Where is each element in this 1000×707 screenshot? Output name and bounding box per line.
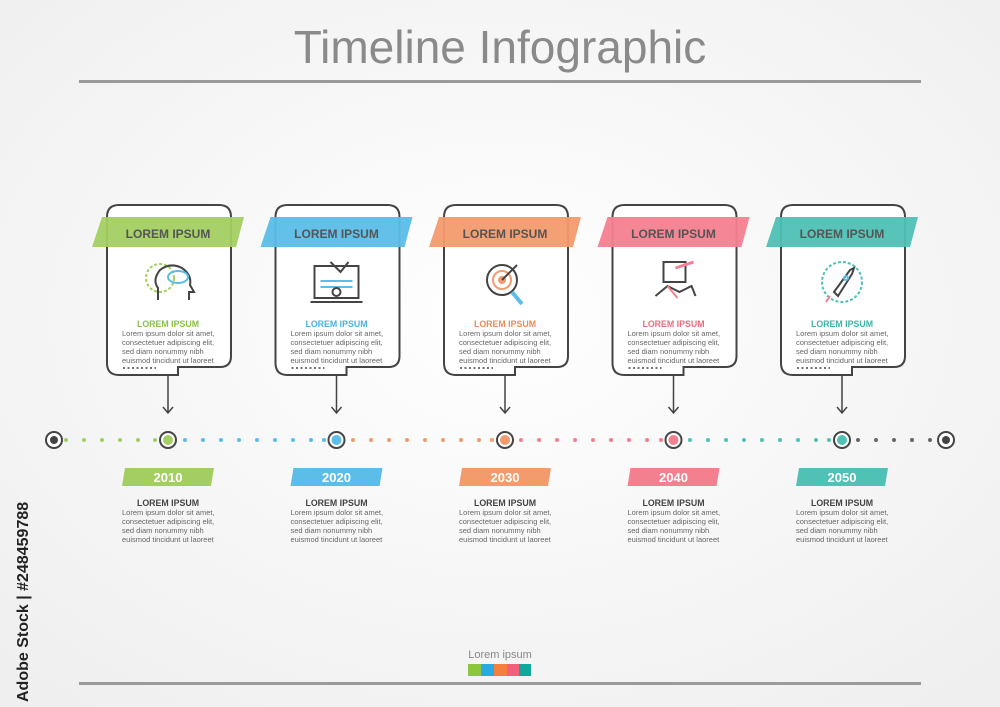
- step 2: LOREM IPSUM: [305, 319, 368, 329]
- step 3: Lorem ipsum dolor sit amet,: [459, 329, 552, 338]
- step 3: LOREM IPSUM: [463, 227, 547, 241]
- step 3: euismod tincidunt ut laoreet: [459, 356, 552, 365]
- title: Timeline Infographic: [294, 21, 706, 73]
- step 1: LOREM IPSUM: [137, 319, 199, 329]
- step 2: euismod tincidunt ut laoreet: [290, 535, 383, 544]
- step 1: Lorem ipsum dolor sit amet,: [122, 329, 215, 338]
- step 1: LOREM IPSUM: [126, 227, 210, 241]
- step 5: consectetuer adipiscing elit,: [796, 338, 888, 347]
- step 3: [429, 205, 581, 544]
- step 4: LOREM IPSUM: [631, 227, 716, 241]
- step 5: euismod tincidunt ut laoreet: [796, 356, 889, 365]
- step 3: sed diam nonummy nibh: [459, 347, 541, 356]
- step 1: euismod tincidunt ut laoreet: [122, 356, 215, 365]
- step 5: euismod tincidunt ut laoreet: [796, 535, 889, 544]
- step 3: Lorem ipsum dolor sit amet,: [459, 508, 552, 517]
- step 1: LOREM IPSUM: [137, 498, 199, 508]
- step 5: Lorem ipsum dolor sit amet,: [796, 508, 889, 517]
- step 2: LOREM IPSUM: [294, 227, 379, 241]
- step 2: euismod tincidunt ut laoreet: [290, 356, 383, 365]
- step 1: [92, 205, 244, 544]
- step 5: Lorem ipsum dolor sit amet,: [796, 329, 889, 338]
- step 5: sed diam nonummy nibh: [796, 347, 878, 356]
- step 5: LOREM IPSUM: [800, 227, 884, 241]
- step 1: consectetuer adipiscing elit,: [122, 517, 214, 526]
- step 4: euismod tincidunt ut laoreet: [628, 356, 720, 365]
- step 1: 2010: [154, 470, 182, 485]
- step 5: consectetuer adipiscing elit,: [796, 517, 888, 526]
- timeline: [46, 432, 954, 448]
- step 4: consectetuer adipiscing elit,: [628, 338, 720, 347]
- step 4: consectetuer adipiscing elit,: [628, 517, 720, 526]
- step 2: 2020: [322, 470, 351, 485]
- step 5: LOREM IPSUM: [811, 498, 873, 508]
- step 1: euismod tincidunt ut laoreet: [122, 535, 215, 544]
- step 5: [766, 205, 918, 544]
- step 2: sed diam nonummy nibh: [290, 347, 372, 356]
- step 4: sed diam nonummy nibh: [628, 526, 709, 535]
- step 1: sed diam nonummy nibh: [122, 347, 204, 356]
- step 5: sed diam nonummy nibh: [796, 526, 878, 535]
- side text: Adobe Stock | #248459788: [15, 502, 32, 702]
- step 4: Lorem ipsum dolor sit amet,: [628, 508, 720, 517]
- step 1: Lorem ipsum dolor sit amet,: [122, 508, 215, 517]
- step 4: [598, 205, 750, 544]
- step 3: LOREM IPSUM: [474, 498, 536, 508]
- step 2: Lorem ipsum dolor sit amet,: [290, 508, 383, 517]
- step 3: sed diam nonummy nibh: [459, 526, 541, 535]
- step 3: 2030: [491, 470, 519, 485]
- footer legend: [468, 649, 532, 676]
- step 4: LOREM IPSUM: [642, 319, 705, 329]
- footer legend: Lorem ipsum: [468, 649, 532, 661]
- step 4: sed diam nonummy nibh: [628, 347, 709, 356]
- step 3: consectetuer adipiscing elit,: [459, 517, 551, 526]
- step 4: Lorem ipsum dolor sit amet,: [628, 329, 720, 338]
- step 4: LOREM IPSUM: [642, 498, 705, 508]
- step 3: consectetuer adipiscing elit,: [459, 338, 551, 347]
- step 2: consectetuer adipiscing elit,: [290, 517, 383, 526]
- step 2: sed diam nonummy nibh: [290, 526, 372, 535]
- step 3: euismod tincidunt ut laoreet: [459, 535, 552, 544]
- step 4: 2040: [659, 470, 688, 485]
- step 2: Lorem ipsum dolor sit amet,: [290, 329, 383, 338]
- step 4: euismod tincidunt ut laoreet: [628, 535, 720, 544]
- step 3: LOREM IPSUM: [474, 319, 536, 329]
- step 2: LOREM IPSUM: [305, 498, 368, 508]
- step 2: [260, 205, 412, 544]
- step 5: LOREM IPSUM: [811, 319, 873, 329]
- step 1: consectetuer adipiscing elit,: [122, 338, 214, 347]
- step 1: sed diam nonummy nibh: [122, 526, 204, 535]
- step 2: consectetuer adipiscing elit,: [290, 338, 383, 347]
- step 5: 2050: [828, 470, 856, 485]
